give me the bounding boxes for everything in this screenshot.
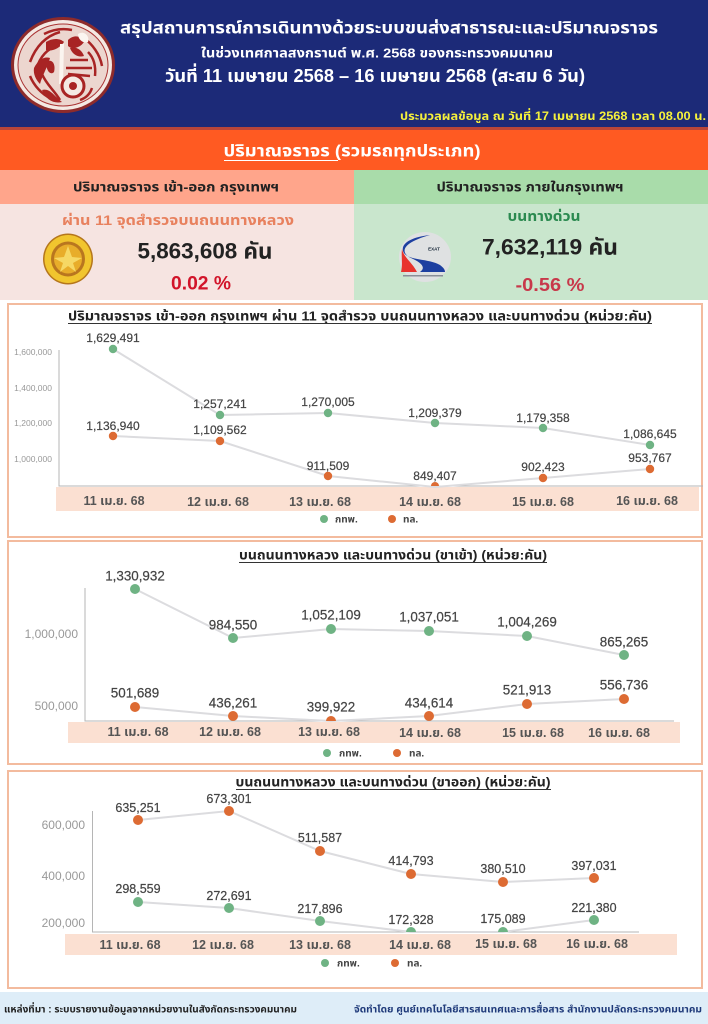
series: expressway: 1,052,109: [301, 608, 361, 622]
subtitle: ในช่วงเทศกาลสงกรานต์ พ.ศ. 2568 ของกระทรวงคมนาคม: [201, 46, 553, 60]
date band: 11 เม.ย. 68: [83, 494, 145, 508]
panel: traffic within Bangkok: [354, 170, 708, 300]
axes: 1,400,000: [14, 383, 52, 393]
axes: 500,000: [35, 699, 78, 713]
series: expressway: 175,089: [480, 912, 526, 926]
series: highway: 902,423: [521, 460, 565, 474]
series: highway: 635,251: [115, 801, 161, 815]
date range: วันที่ 11 เมษายน 2568 – 16 เมษายน 2568 (สะสม 6 วัน): [165, 63, 585, 86]
date band: 11 เม.ย. 68: [107, 725, 169, 739]
axes: 600,000: [42, 818, 85, 832]
series: highway: 380,510: [480, 862, 526, 876]
date band: 13 เม.ย. 68: [298, 725, 360, 739]
date band: 13 เม.ย. 68: [289, 938, 351, 952]
source note: แหล่งที่มา : ระบบรายงานข้อมูลจากหน่วยงานในสังกัดกระทรวงคมนาคม: [4, 1001, 297, 1016]
title: สรุปสถานการณ์การเดินทางด้วยระบบขนส่งสาธารณะและปริมาณจราจร: [120, 18, 658, 38]
series: highway: 673,301: [206, 792, 252, 806]
series: highway: 849,407: [413, 469, 457, 483]
series: highway: 1,136,940: [86, 419, 140, 433]
section heading: traffic volume: [0, 130, 708, 170]
date band: 11 เม.ย. 68: [99, 938, 161, 952]
footer: [0, 992, 708, 1024]
axes: 1,600,000: [14, 347, 52, 357]
axes: [14, 347, 703, 486]
date band: [68, 722, 680, 743]
date band: 16 เม.ย. 68: [566, 937, 628, 951]
series: expressway: 221,380: [571, 901, 617, 915]
panel: inbound line chart: [8, 541, 702, 764]
subheading: highway checkpoints: ผ่าน 11 จุดสำรวจบนถนนทางหลวง: [62, 212, 294, 229]
series: highway: 556,736: [600, 678, 648, 692]
legend: [323, 748, 424, 760]
legend: ทล.: [407, 958, 422, 970]
date band: [65, 934, 677, 955]
series: highway: 501,689: [111, 686, 159, 700]
panel: combined line chart: [8, 304, 703, 537]
icon: ministry seal: [11, 17, 115, 113]
series: expressway: 1,037,051: [399, 610, 459, 624]
series: highway: 953,767: [628, 451, 672, 465]
date band: 16 เม.ย. 68: [616, 494, 678, 508]
subheading: expressway: บนทางด่วน: [508, 208, 580, 224]
series: expressway: 1,270,005: [301, 395, 355, 409]
icon: highways department emblem: [43, 234, 93, 284]
chart title: ปริมาณจราจร เข้า-ออก กรุงเทพฯ ผ่าน 11 จุดสำรวจ บนถนนทางหลวง และบนทางด่วน (หน่วย:คัน): [68, 308, 652, 324]
series: expressway: 1,004,269: [497, 614, 557, 630]
series: highway: 399,922: [307, 700, 355, 714]
date band: 14 เม.ย. 68: [389, 938, 451, 952]
series: highway: [86, 419, 672, 487]
axes: [25, 588, 674, 721]
date band: 16 เม.ย. 68: [588, 726, 650, 740]
series: highway: 397,031: [571, 859, 617, 873]
legend: กทพ.: [337, 958, 360, 970]
date band: 15 เม.ย. 68: [475, 937, 537, 951]
icon: expressway authority logo: [399, 232, 451, 282]
series: expressway: [115, 882, 617, 932]
series: highway: 1,109,562: [193, 423, 247, 437]
date band: 12 เม.ย. 68: [199, 725, 261, 739]
date band: 12 เม.ย. 68: [192, 938, 254, 952]
series: expressway: 172,328: [388, 913, 434, 927]
legend: ทล.: [409, 748, 424, 760]
header band: [0, 0, 708, 130]
date band: 14 เม.ย. 68: [399, 726, 461, 740]
legend: กทพ.: [339, 748, 362, 760]
axes: 1,000,000: [25, 627, 78, 641]
axes: 1,000,000: [14, 454, 52, 464]
data timestamp: ประมวลผลข้อมูล ณ วันที่ 17 เมษายน 2568 เวลา 08.00 น.: [400, 108, 706, 124]
producer credit: จัดทำโดย ศูนย์เทคโนโลยีสารสนเทศและการสื่อสาร สำนักงานปลัดกระทรวงคมนาคม: [354, 1002, 702, 1016]
series: expressway: 217,896: [297, 902, 343, 916]
series: highway: 911,509: [307, 459, 350, 473]
total: expressway volume: 7,632,119 คัน: [482, 234, 618, 260]
series: expressway: 1,629,491: [86, 331, 140, 345]
date band: 14 เม.ย. 68: [399, 495, 461, 509]
series: expressway: 1,209,379: [408, 406, 462, 420]
total: highway volume: 5,863,608 คัน: [138, 238, 272, 264]
date band: 15 เม.ย. 68: [512, 495, 574, 509]
date band: 12 เม.ย. 68: [187, 495, 249, 509]
change: expressway percent: -0.56 %: [516, 275, 584, 295]
series: expressway: 1,257,241: [193, 397, 247, 411]
series: expressway: [105, 568, 648, 660]
series: expressway: 272,691: [206, 889, 252, 903]
legend: กทพ.: [335, 514, 358, 526]
date band: 13 เม.ย. 68: [289, 495, 351, 509]
panel: traffic in and out of Bangkok: [0, 170, 354, 300]
chart title: บนถนนทางหลวง และบนทางด่วน (ขาเข้า) (หน่วย:คัน): [239, 548, 547, 562]
axes: [42, 811, 639, 932]
axes: 400,000: [42, 869, 85, 883]
date band: [56, 487, 699, 511]
section heading: traffic volume: ปริมาณจราจร (รวมรถทุกประเภท): [224, 142, 480, 162]
series: expressway: 865,265: [600, 634, 648, 650]
series: highway: 436,261: [209, 696, 257, 710]
series: expressway: 1,330,932: [105, 568, 165, 584]
series: expressway: 1,179,358: [516, 411, 570, 425]
series: expressway: [86, 331, 677, 449]
subheading: within Bangkok: ปริมาณจราจร ภายในกรุงเทพฯ: [436, 180, 624, 194]
subheading: in and out: ปริมาณจราจร เข้า-ออก กรุงเทพฯ: [73, 180, 279, 194]
series: highway: [111, 678, 648, 721]
series: highway: 521,913: [503, 682, 551, 698]
chart title: บนถนนทางหลวง และบนทางด่วน (ขาออก) (หน่วย:คัน): [236, 774, 550, 790]
legend: [320, 514, 418, 526]
series: highway: 511,587: [298, 831, 342, 845]
legend: [321, 958, 422, 970]
series: highway: 414,793: [388, 854, 434, 868]
series: expressway: 1,086,645: [623, 427, 677, 441]
legend: ทล.: [403, 514, 418, 526]
axes: 200,000: [42, 916, 85, 930]
icon: expressway authority logo: EXAT: [428, 246, 440, 252]
series: expressway: 984,550: [209, 618, 257, 632]
panel: outbound line chart: [8, 771, 702, 988]
date band: 15 เม.ย. 68: [502, 726, 564, 740]
series: highway: 434,614: [405, 696, 454, 710]
series: expressway: 298,559: [115, 882, 161, 896]
axes: 1,200,000: [14, 418, 52, 428]
series: highway: [115, 792, 617, 887]
change: highway percent: 0.02 %: [171, 274, 231, 294]
